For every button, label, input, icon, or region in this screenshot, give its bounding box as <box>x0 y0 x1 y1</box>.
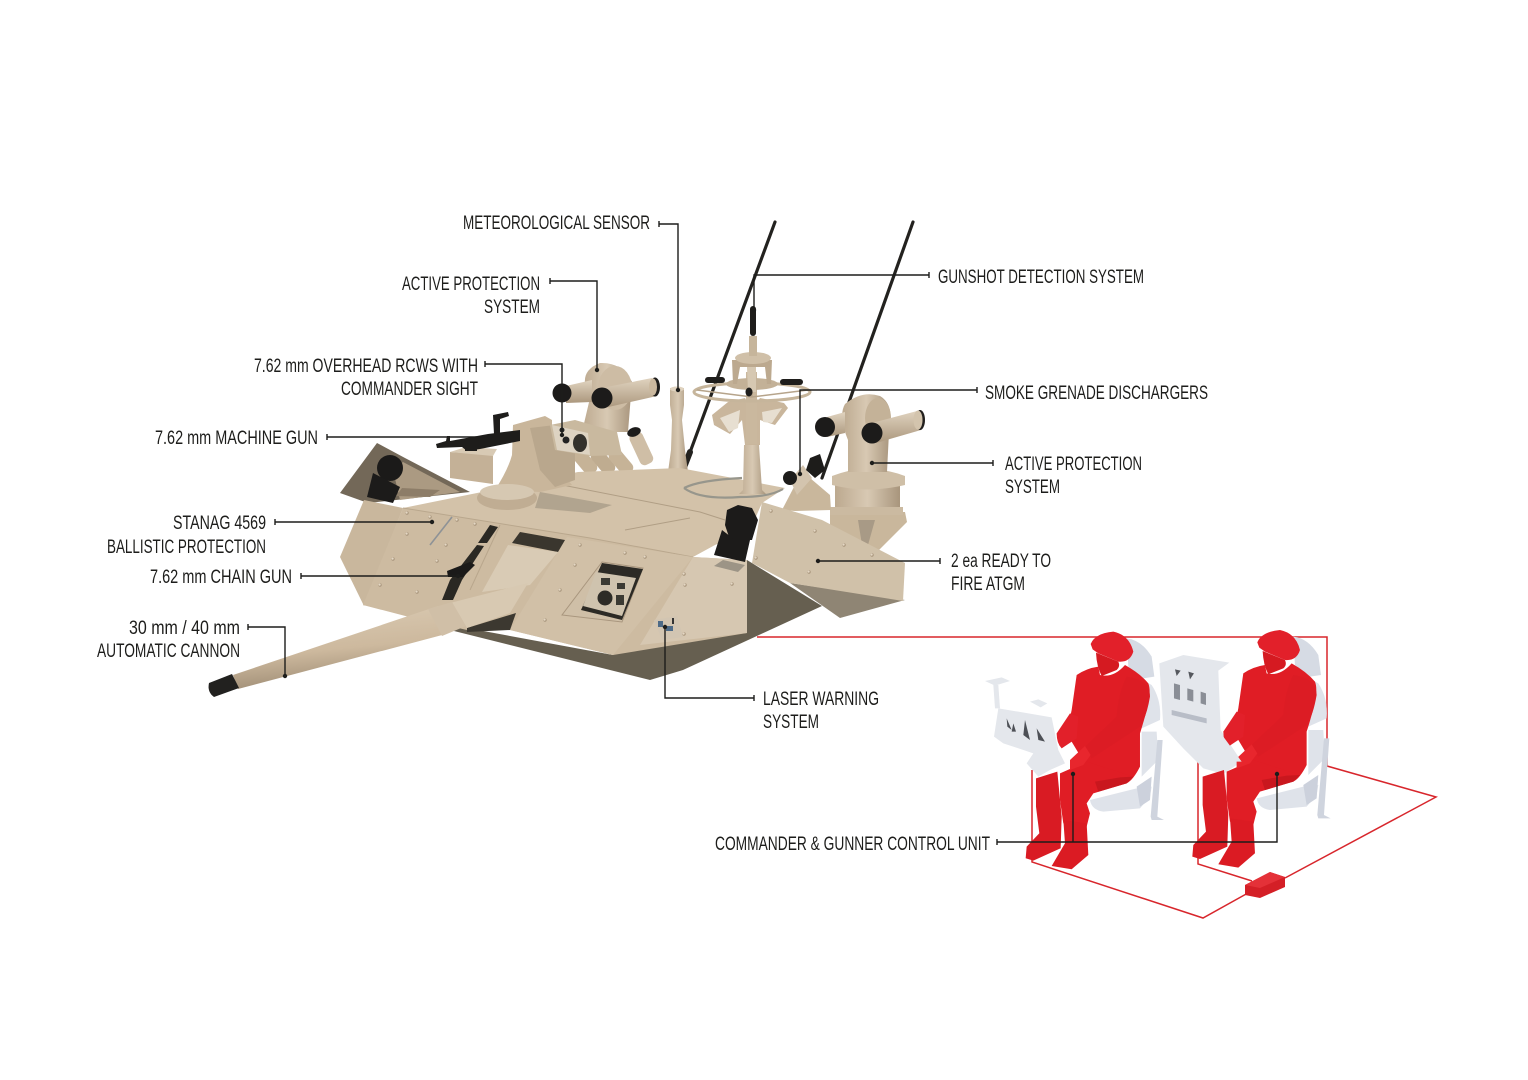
label: automatic cannon: AUTOMATIC CANNON <box>97 641 240 662</box>
window plate <box>510 537 693 655</box>
cannon mantlet <box>450 583 528 628</box>
label: ballistic protection: STANAG 4569 <box>173 513 266 534</box>
label: overhead RCWS <box>254 356 478 400</box>
label: chain gun: 7.62 mm CHAIN GUN <box>150 567 292 588</box>
gunner seat <box>1090 638 1164 820</box>
label: control unit: COMMANDER & GUNNER CONTROL UNIT <box>715 834 990 855</box>
label: automatic cannon: 30 mm / 40 mm <box>129 618 240 639</box>
deck panel seams <box>547 482 725 530</box>
deck shadow <box>535 492 612 513</box>
spare rounds behind hatch <box>571 425 655 477</box>
right ATGM launcher <box>752 502 905 618</box>
left active protection system <box>552 363 660 432</box>
gunner figure <box>1026 632 1150 869</box>
commander figure <box>1192 630 1317 868</box>
centre inner panel <box>482 545 558 592</box>
label: gunshot detection system: GUNSHOT DETECTION SYSTEM <box>938 267 1144 288</box>
label: laser warning system: SYSTEM <box>763 712 819 733</box>
label: ready to fire ATGM: 2 ea READY TO <box>951 551 1051 572</box>
meteorological sensor <box>668 386 688 472</box>
gunner control panel <box>985 677 1065 777</box>
label: active protection system, right <box>1005 454 1142 498</box>
callout dots <box>283 308 1279 776</box>
label: active protection system, right: SYSTEM <box>1005 477 1060 498</box>
deck mast marking <box>684 478 783 498</box>
label: ballistic protection <box>107 513 266 558</box>
plate edge highlights <box>403 508 693 557</box>
label: overhead RCWS: 7.62 mm OVERHEAD RCWS WITH <box>254 356 478 377</box>
label: ballistic protection: BALLISTIC PROTECTION <box>107 537 266 558</box>
commander screen <box>1215 735 1242 762</box>
label: smoke grenade dischargers: SMOKE GRENADE DISCHARGERS <box>985 383 1208 404</box>
left ATGM launcher <box>340 443 470 503</box>
hull lower shadow below gun <box>467 613 516 632</box>
top deck <box>403 468 785 557</box>
control box <box>1245 872 1285 898</box>
chain gun slot <box>442 525 498 600</box>
stripe on left armor <box>430 517 452 545</box>
RCWS mount <box>450 416 622 510</box>
label: automatic cannon <box>97 618 240 662</box>
front sensor window <box>562 562 643 622</box>
label: laser warning system: LASER WARNING <box>763 689 879 710</box>
label: meteorological sensor: METEOROLOGICAL SENSOR <box>463 213 650 234</box>
crew station: commander <box>1159 630 1331 868</box>
machine gun <box>436 412 520 451</box>
hull underside <box>430 560 822 680</box>
gunshot detection sensor <box>750 306 756 336</box>
label: overhead RCWS: COMMANDER SIGHT <box>341 379 478 400</box>
label: laser warning system <box>763 689 879 733</box>
label: active protection system, left <box>402 274 540 318</box>
callout leaders <box>248 221 1277 845</box>
label: active protection system, left: SYSTEM <box>484 297 540 318</box>
left armor seam <box>470 525 500 590</box>
red connection wiring <box>757 637 1436 918</box>
right active protection system <box>815 394 925 552</box>
cannon collar <box>428 602 466 636</box>
label: active protection system, left: ACTIVE PROTECTION <box>402 274 540 295</box>
muzzle brake <box>209 674 239 697</box>
label: ready to fire ATGM: FIRE ATGM <box>951 574 1025 595</box>
label: active protection system, right: ACTIVE PROTECTION <box>1005 454 1142 475</box>
chain gun <box>447 562 475 577</box>
commander seat <box>1257 637 1331 818</box>
commander control panel <box>1159 655 1242 774</box>
label: ready to fire ATGM <box>951 551 1051 595</box>
crew station: gunner <box>985 632 1164 869</box>
centre opening <box>512 532 565 552</box>
right ATGM launcher black mount <box>714 505 758 572</box>
laser warning sensor <box>654 616 683 640</box>
front hull plates base <box>363 508 747 655</box>
label: machine gun: 7.62 mm MACHINE GUN <box>155 428 318 449</box>
hull side panel <box>640 557 747 645</box>
cannon barrel <box>233 606 446 689</box>
smoke grenade dischargers <box>782 454 831 511</box>
hull rivets <box>378 511 734 636</box>
left hull wing <box>340 500 403 606</box>
central mast <box>694 306 810 494</box>
antennas <box>683 222 913 478</box>
turret <box>209 222 925 697</box>
